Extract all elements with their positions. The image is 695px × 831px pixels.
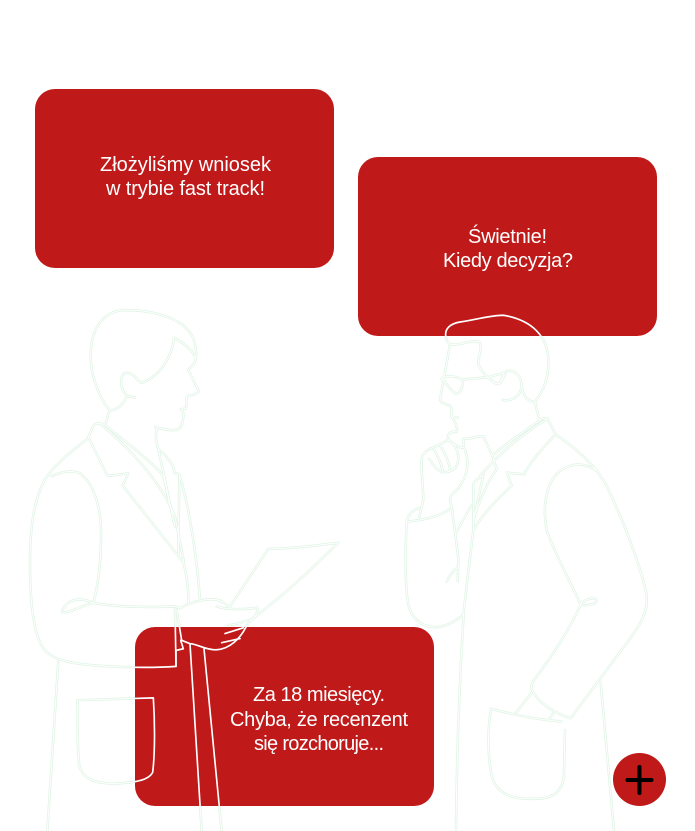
illustration: thoughtful doctor with glasses bbox=[406, 315, 647, 831]
speech panel: application submitted bbox=[35, 89, 334, 268]
illustration: doctor holding a sheet of paper bbox=[30, 310, 338, 831]
speech panel: in 18 months bbox=[135, 627, 434, 806]
speech panel: when is the decision: Świetnie! bbox=[468, 224, 547, 248]
white coat outline over the red panel bbox=[135, 627, 247, 806]
speech panel: in 18 months: się rozchoruje... bbox=[254, 733, 384, 755]
speech panel: in 18 months: Chyba, że recenzent bbox=[230, 709, 408, 731]
white head outline over the red panel bbox=[444, 314, 542, 336]
speech panel: application submitted: w trybie fast track! bbox=[105, 178, 265, 200]
speech panel: in 18 months: Za 18 miesięcy. bbox=[253, 684, 385, 706]
icon: plus button bbox=[613, 753, 666, 806]
speech panel: application submitted: Złożyliśmy wniosek bbox=[100, 154, 272, 176]
speech panel: when is the decision bbox=[358, 157, 657, 336]
speech panel: when is the decision: Kiedy decyzja? bbox=[443, 250, 573, 272]
